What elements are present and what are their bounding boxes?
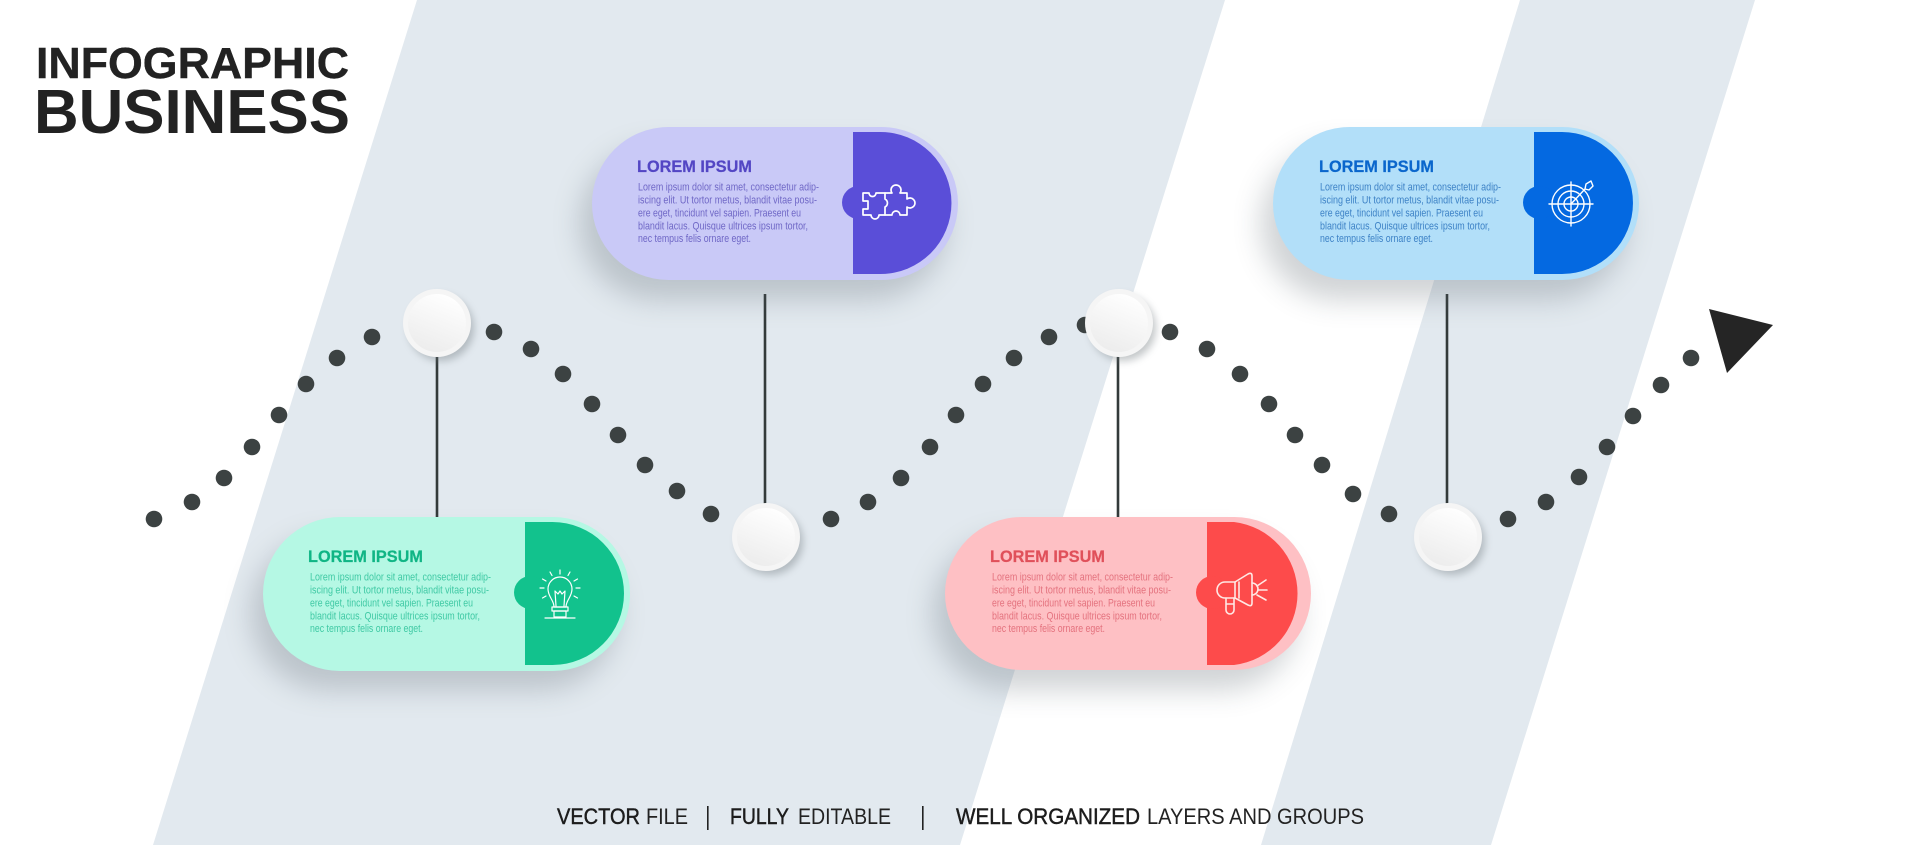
heading: LOREM IPSUM (308, 547, 423, 566)
footer caption: VECTOR (557, 804, 640, 829)
body text: Lorem ipsum dolor sit amet, consectetur adip- (638, 181, 819, 193)
body text: Lorem ipsum dolor sit amet, consectetur adip- (310, 571, 491, 583)
body text: ere eget, tincidunt vel sapien. Praesent eu (1320, 207, 1483, 219)
body text: blandit lacus. Quisque ultrices ipsum tortor, (1320, 220, 1490, 232)
body text: Lorem ipsum dolor sit amet, consectetur adip- (992, 571, 1173, 583)
body text: ere eget, tincidunt vel sapien. Praesent eu (638, 207, 801, 219)
icon: light bulb (540, 570, 580, 618)
panel: red card (933, 517, 1311, 690)
icon: megaphone (1217, 573, 1267, 614)
node circle 2 (732, 503, 803, 575)
body text (310, 571, 491, 635)
body text: Lorem ipsum dolor sit amet, consectetur adip- (1320, 181, 1501, 193)
connector line 3 (1117, 350, 1119, 518)
heading: LOREM IPSUM (1319, 157, 1434, 176)
footer caption: WELL ORGANIZED (956, 804, 1140, 829)
title: BUSINESS (34, 78, 350, 147)
connector line 1 (436, 350, 438, 518)
background diagonal band right (1261, 0, 1755, 845)
title: INFOGRAPHIC (36, 39, 349, 88)
body text: blandit lacus. Quisque ultrices ipsum tortor, (638, 220, 808, 232)
body text: nec tempus felis ornare eget. (638, 233, 751, 245)
footer caption: EDITABLE (798, 804, 891, 829)
body text: iscing elit. Ut tortor metus, blandit vitae posu- (638, 194, 817, 206)
body text: blandit lacus. Quisque ultrices ipsum tortor, (310, 610, 480, 622)
icon: puzzle pieces (863, 185, 915, 219)
footer caption: FILE (646, 804, 688, 829)
body text (638, 181, 819, 245)
heading: LOREM IPSUM (990, 547, 1105, 566)
background diagonal band left (153, 0, 1225, 845)
body text: ere eget, tincidunt vel sapien. Praesent eu (992, 597, 1155, 609)
icon: target with arrow (1549, 181, 1593, 226)
connector line 4 (1446, 294, 1448, 510)
node circle 4 (1414, 503, 1485, 575)
connector line 2 (764, 294, 766, 510)
panel: blue card (1261, 127, 1639, 300)
footer caption: LAYERS AND GROUPS (1147, 804, 1364, 829)
node circle 3 (1085, 289, 1156, 361)
title (34, 39, 350, 147)
body text: ere eget, tincidunt vel sapien. Praesent eu (310, 597, 473, 609)
panel: green card (251, 517, 630, 690)
body text: nec tempus felis ornare eget. (310, 623, 423, 635)
body text: iscing elit. Ut tortor metus, blandit vitae posu- (310, 584, 489, 596)
footer caption (557, 804, 1364, 830)
node circle 1 (403, 289, 474, 361)
dotted wave path (146, 317, 1699, 527)
heading: LOREM IPSUM (637, 157, 752, 176)
body text (1320, 181, 1501, 245)
body text: iscing elit. Ut tortor metus, blandit vitae posu- (1320, 194, 1499, 206)
body text: blandit lacus. Quisque ultrices ipsum tortor, (992, 610, 1162, 622)
arrow head (1709, 309, 1773, 373)
body text: nec tempus felis ornare eget. (992, 623, 1105, 635)
body text: nec tempus felis ornare eget. (1320, 233, 1433, 245)
panel: purple card (580, 127, 958, 300)
body text (992, 571, 1173, 635)
footer caption: FULLY (730, 804, 789, 829)
body text: iscing elit. Ut tortor metus, blandit vitae posu- (992, 584, 1171, 596)
